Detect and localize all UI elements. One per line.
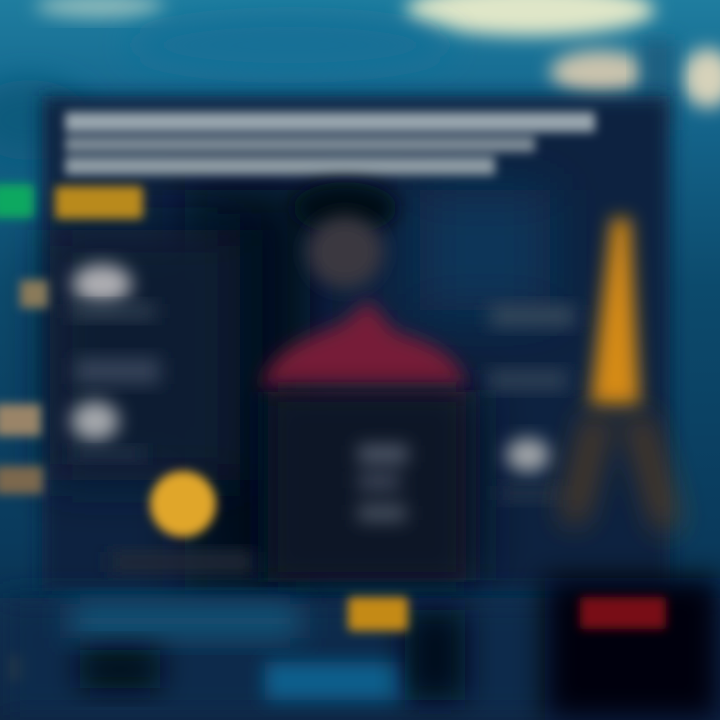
lower band [0, 578, 720, 720]
central figure [262, 182, 466, 582]
stat one detail [75, 358, 160, 384]
right stat column [488, 305, 575, 501]
stat two caption [70, 448, 145, 460]
yellow tag [55, 186, 143, 219]
torso text [358, 445, 408, 521]
tower [572, 218, 668, 528]
tower legs [572, 415, 668, 528]
right stat two [488, 370, 568, 390]
green tag [0, 184, 34, 218]
stat two [71, 401, 119, 441]
right stat one [490, 305, 575, 327]
left edge labels [0, 280, 52, 681]
head [307, 216, 383, 288]
main dark panel [42, 96, 670, 591]
circle caption [110, 552, 255, 572]
red button [580, 597, 666, 629]
stat one caption [70, 303, 155, 319]
tower top [590, 218, 640, 405]
left stat column [70, 264, 160, 460]
gold circle [150, 471, 216, 537]
right stat three [506, 438, 550, 472]
right stat caption [500, 485, 560, 501]
stat one [72, 264, 132, 304]
torso [268, 392, 466, 582]
hair [293, 182, 397, 234]
title [65, 112, 595, 175]
shoulders [262, 300, 466, 388]
yellow button [348, 597, 408, 631]
